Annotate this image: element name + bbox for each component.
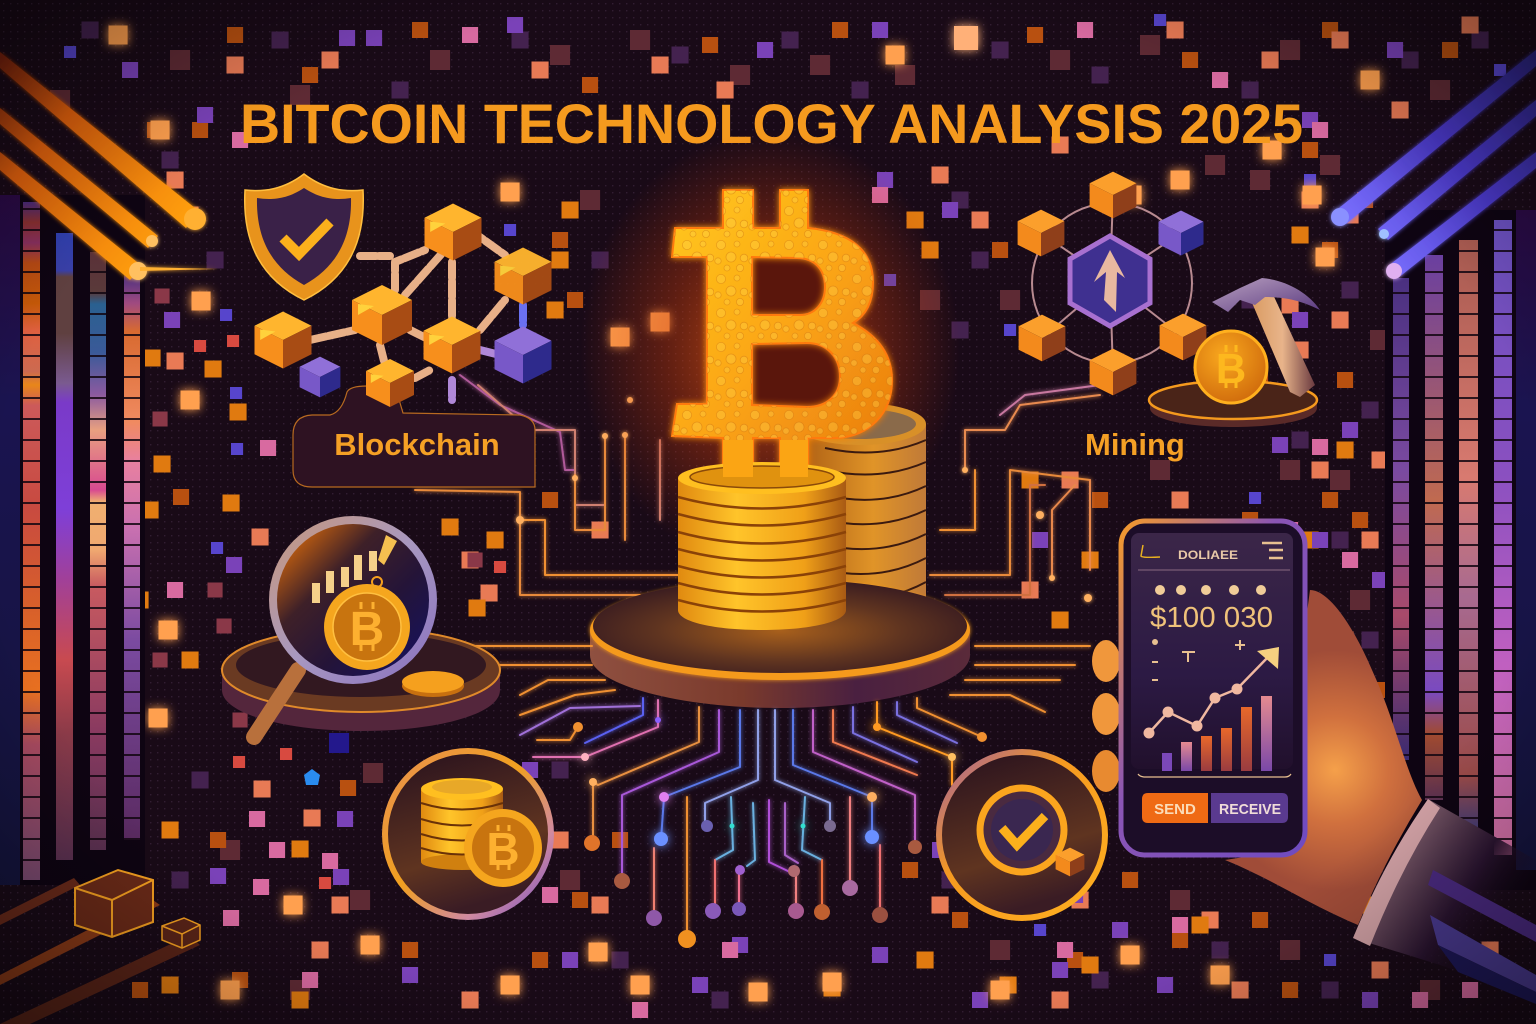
magnifier coin: B <box>350 603 384 656</box>
left data columns <box>0 195 145 885</box>
magnifier platform <box>222 628 500 731</box>
phone <box>1121 521 1305 855</box>
send button: SEND <box>1154 801 1196 818</box>
right data columns <box>1385 210 1536 890</box>
phone header: DOLIAEE <box>1178 548 1238 562</box>
bitcoin texture <box>672 190 892 477</box>
bottom left beams and cubes <box>0 870 200 1024</box>
bitcoin counters <box>745 250 845 412</box>
beams top right <box>1331 50 1536 279</box>
balance dots <box>1155 585 1266 595</box>
hand holding phone <box>1092 590 1422 925</box>
coins badge: B <box>486 823 520 875</box>
mining coin <box>1195 331 1267 403</box>
send button <box>1142 793 1208 823</box>
coins badge <box>385 751 551 917</box>
lower circuit board <box>470 646 1090 940</box>
magnifier coin <box>324 577 410 670</box>
blockchain network <box>254 204 552 407</box>
central glow <box>580 130 960 570</box>
blockchain label <box>293 386 535 487</box>
beams top left <box>0 52 218 280</box>
glowing nodes <box>581 717 956 846</box>
blue marker <box>304 769 320 785</box>
mining label: Mining <box>1085 427 1185 462</box>
chain links <box>310 230 523 400</box>
mining network <box>1018 172 1206 395</box>
circuit nodes <box>573 722 987 948</box>
blockchain label: Blockchain <box>334 427 500 462</box>
receive button <box>1211 793 1288 823</box>
mining platform <box>1149 381 1317 427</box>
small coin <box>402 671 464 697</box>
trend line <box>1144 647 1279 738</box>
small chart marks <box>1152 639 1245 680</box>
upper circuit lines <box>415 375 1100 595</box>
pickaxe <box>1212 278 1320 397</box>
verification badge <box>939 752 1105 918</box>
bitcoin symbol <box>672 190 892 477</box>
phone header <box>1138 543 1290 570</box>
balance: $100 030 <box>1150 602 1273 634</box>
circuit dots upper <box>516 397 1092 602</box>
glowing pixel squares <box>118 35 1370 992</box>
receive button: RECEIVE <box>1219 801 1281 818</box>
central platform <box>590 579 970 708</box>
phone screen <box>1131 533 1293 769</box>
magnifying glass <box>254 516 437 737</box>
bar chart <box>1162 696 1272 771</box>
mining coin: B <box>1216 345 1246 392</box>
shield icon <box>245 174 363 300</box>
back coin stack <box>794 403 926 626</box>
front coin stack <box>678 462 846 630</box>
sleeve <box>1353 799 1536 1004</box>
title: BITCOIN TECHNOLOGY ANALYSIS 2025 <box>240 92 1303 155</box>
bitcoin legs overlay <box>723 440 808 477</box>
